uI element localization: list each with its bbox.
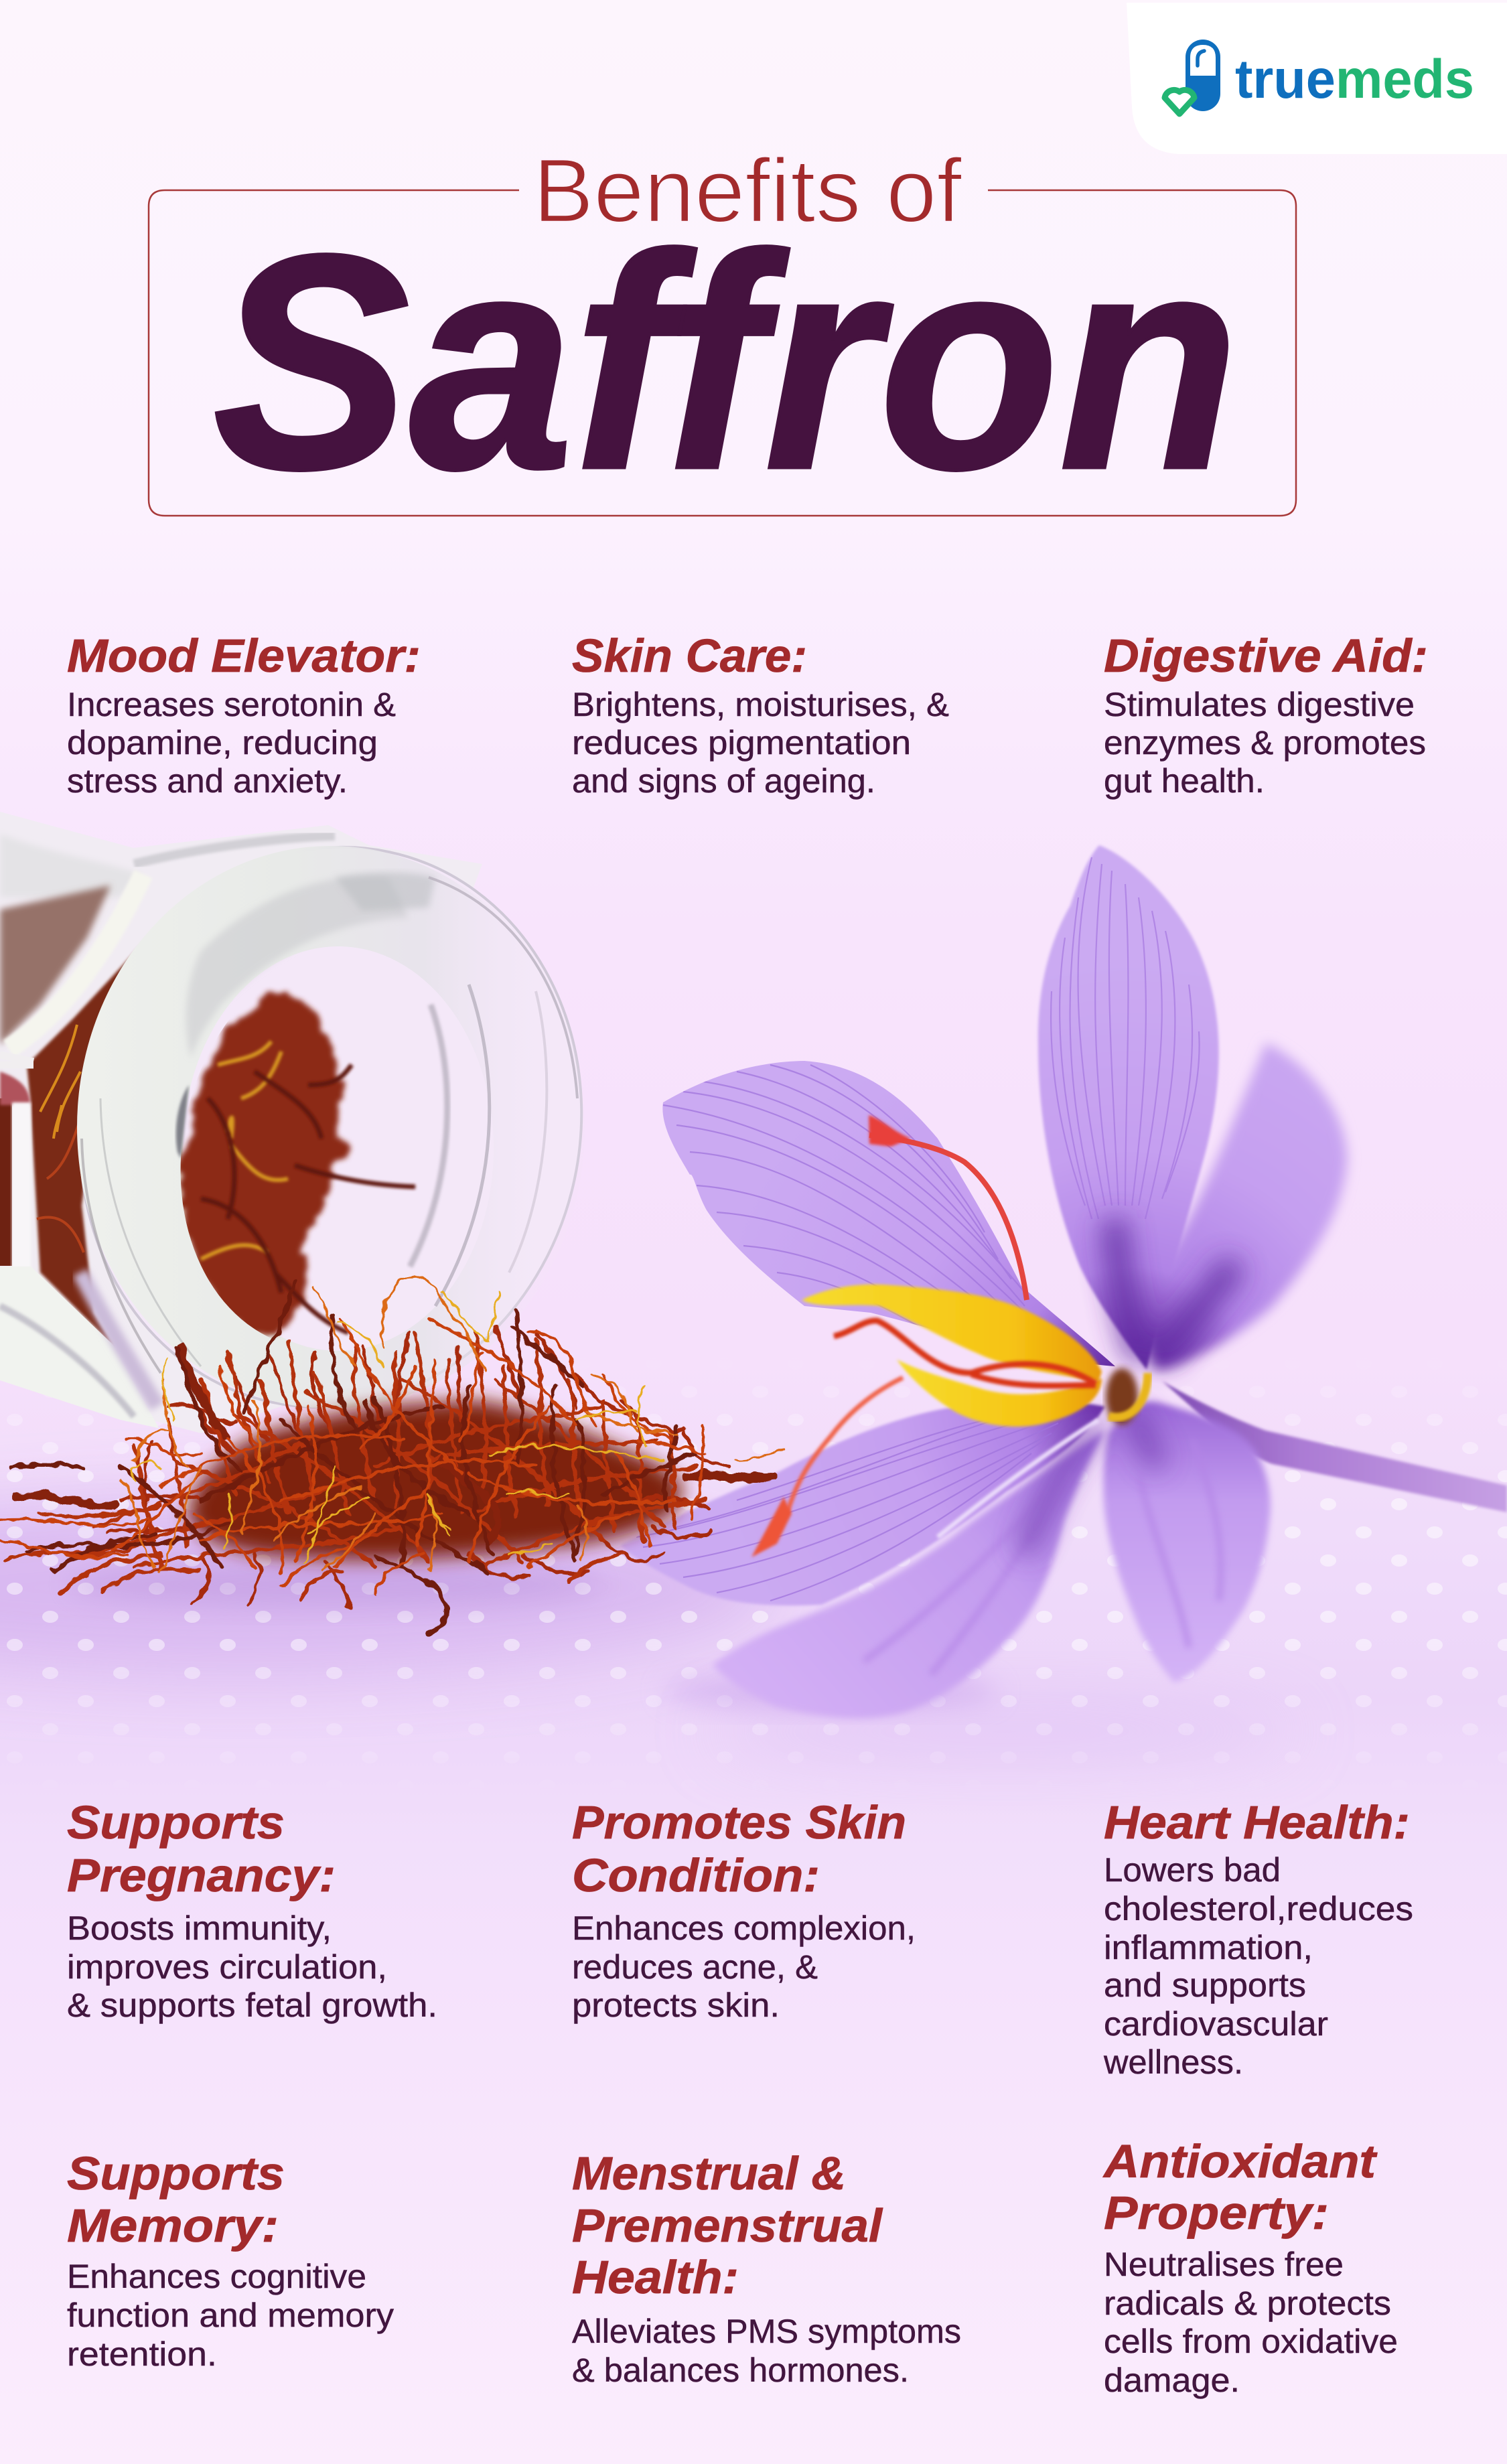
benefit: Menstrual and Premenstrual Health: Health:	[572, 2251, 739, 2303]
logo panel	[1127, 3, 1507, 154]
benefit: Mood Elevator: stress and anxiety.	[67, 762, 348, 800]
flower centre	[1106, 1368, 1138, 1425]
jar diagonal highlight	[9, 874, 143, 1049]
benefit: Heart Health: cardiovascular	[1104, 2005, 1328, 2043]
red stigma upper	[869, 1135, 1027, 1300]
benefit: Supports Pregnancy	[67, 1796, 437, 2024]
strands: red	[0, 1319, 707, 1594]
benefit: Mood Elevator: dopamine, reducing	[67, 724, 378, 762]
petal: top tall	[1038, 845, 1219, 1370]
red stigma lower	[787, 1378, 903, 1514]
benefit: Antioxidant Property	[1102, 2135, 1398, 2399]
benefit: Skin Care	[572, 630, 949, 800]
strands: dense vertical and diagonal	[7, 1333, 703, 1601]
jar contents: strands	[40, 1025, 80, 1139]
benefit: Supports Memory: function and memory	[67, 2297, 394, 2334]
benefit: Supports Memory: Memory:	[67, 2199, 279, 2252]
petal highlight	[938, 1420, 1098, 1537]
benefit: Heart Health	[1103, 1796, 1413, 2081]
yellow stamens	[802, 1285, 1102, 1382]
logo wordmark: truemeds	[1235, 49, 1474, 110]
jar vertical highlight	[12, 1102, 31, 1277]
jar rim reflections	[186, 876, 409, 1058]
veins: lower left petal	[636, 1410, 1058, 1601]
benefit: Skin Care: Skin Care:	[572, 630, 807, 682]
benefit: Menstrual and Premenstrual Health: & balances hormones.	[572, 2351, 909, 2389]
saffron pile	[0, 1276, 784, 1634]
pile mass	[188, 1400, 683, 1560]
benefit: Promotes Skin Condition: Condition:	[572, 1849, 820, 1901]
benefit: Heart Health: Heart Health:	[1104, 1796, 1410, 1849]
petal: upper left	[662, 1061, 1115, 1366]
strands: dark	[10, 1282, 697, 1634]
benefit: Digestive Aid: Stimulates digestive	[1104, 686, 1415, 723]
benefit: Mood Elevator: Mood Elevator:	[67, 630, 421, 682]
benefit: Antioxidant Property: cells from oxidative	[1104, 2323, 1398, 2360]
benefit: Promotes Skin Condition: Promotes Skin	[572, 1796, 906, 1849]
benefit: Antioxidant Property: Property:	[1104, 2187, 1329, 2239]
jar shoulder	[0, 812, 482, 1433]
title line: Benefits of: Benefits of	[533, 140, 962, 241]
benefit: Promotes Skin Condition: Enhances complexion,	[572, 1909, 916, 1947]
benefit: Supports Pregnancy: improves circulation,	[67, 1948, 387, 1986]
saffron inside jar	[180, 991, 415, 1335]
benefit: Supports Memory: Supports	[67, 2147, 285, 2199]
veins: top petal	[1051, 857, 1200, 1219]
benefit: Heart Health: and supports	[1104, 1966, 1306, 2004]
benefit: Supports Pregnancy: Pregnancy:	[67, 1849, 336, 1901]
benefit: Supports Memory	[67, 2147, 394, 2373]
petal: bottom large	[713, 1430, 1105, 1718]
benefit: Promotes Skin Condition	[572, 1796, 916, 2024]
benefit: Digestive Aid	[1104, 630, 1428, 800]
glass jar	[0, 812, 583, 1433]
strands	[0, 1276, 784, 1634]
benefit: Skin Care: and signs of ageing.	[572, 762, 875, 800]
benefit: Promotes Skin Condition: reduces acne, &	[572, 1948, 818, 1986]
benefit: Antioxidant Property: damage.	[1104, 2362, 1240, 2399]
benefit: Antioxidant Property: Neutralises free	[1104, 2246, 1344, 2283]
benefit: Digestive Aid: Digestive Aid:	[1104, 630, 1428, 682]
benefit: Antioxidant Property: radicals & protects	[1104, 2285, 1391, 2322]
jar lower glass	[0, 1266, 201, 1437]
petal shading lower	[1025, 1410, 1159, 1554]
strands: orange	[121, 1276, 784, 1574]
benefit: Menstrual and Premenstrual Health: Menstrual &	[572, 2147, 846, 2199]
title	[213, 140, 1239, 532]
background	[0, 864, 1507, 2153]
petal shading	[1115, 1219, 1236, 1360]
benefit: Heart Health: cholesterol,reduces	[1104, 1890, 1413, 1928]
benefit: Digestive Aid: enzymes & promotes	[1104, 724, 1426, 762]
benefit: Supports Pregnancy: Supports	[67, 1796, 285, 1849]
pile shadow	[67, 1561, 603, 1607]
jar rim band	[77, 846, 585, 1408]
benefit: Skin Care: Brightens, moisturises, &	[572, 686, 949, 723]
jar contents: brown band	[0, 885, 111, 1045]
flower stem	[1162, 1381, 1507, 1512]
petal streaks lower	[864, 1440, 1221, 1674]
petal: bottom right	[1103, 1402, 1271, 1682]
jar right wall lines	[410, 877, 577, 1306]
petal: lower left	[620, 1399, 1105, 1605]
benefit: Menstrual and Premenstrual Health: Premenstrual	[572, 2199, 883, 2252]
benefit: Antioxidant Property: Antioxidant	[1102, 2135, 1378, 2187]
benefit: Supports Memory: retention.	[67, 2335, 217, 2373]
benefit: Mood Elevator	[67, 630, 421, 800]
benefit: Heart Health: inflammation,	[1104, 1929, 1313, 1966]
benefit: Menstrual and Premenstrual Health: Alleviates PMS symptoms	[572, 2313, 961, 2350]
benefit: Skin Care: reduces pigmentation	[572, 724, 911, 762]
icon: heart	[1165, 90, 1194, 114]
benefit: Heart Health: Lowers bad	[1104, 1851, 1281, 1889]
icon: capsule	[1186, 40, 1220, 111]
flower shadow on cloth	[663, 1672, 998, 1710]
benefit: Supports Pregnancy: & supports fetal growth.	[67, 1986, 437, 2024]
benefit: Digestive Aid: gut health.	[1104, 762, 1265, 800]
petal: right blurred	[1145, 1043, 1347, 1370]
red stigma middle	[834, 1321, 1096, 1386]
jar rim outer	[29, 800, 633, 1454]
title line: Saffron: Saffron	[213, 191, 1239, 532]
title frame	[149, 190, 1296, 516]
benefit: Mood Elevator: Increases serotonin &	[67, 686, 396, 723]
saffron flower	[620, 845, 1507, 1718]
veins: upper left petal	[663, 1065, 1031, 1329]
strands: thick dark clumps	[15, 1346, 774, 1540]
strands: yellow	[132, 1293, 663, 1561]
benefit: Promotes Skin Condition: protects skin.	[572, 1986, 780, 2024]
benefit: Supports Memory: Enhances cognitive	[67, 2258, 366, 2295]
benefit: Menstrual and Premenstrual Health	[572, 2147, 961, 2389]
benefit: Heart Health: wellness.	[1103, 2043, 1243, 2081]
benefit: Supports Pregnancy: Boosts immunity,	[67, 1909, 332, 1947]
jar contents: dark saffron	[27, 901, 208, 1346]
strands: edge fringe	[107, 1326, 730, 1607]
